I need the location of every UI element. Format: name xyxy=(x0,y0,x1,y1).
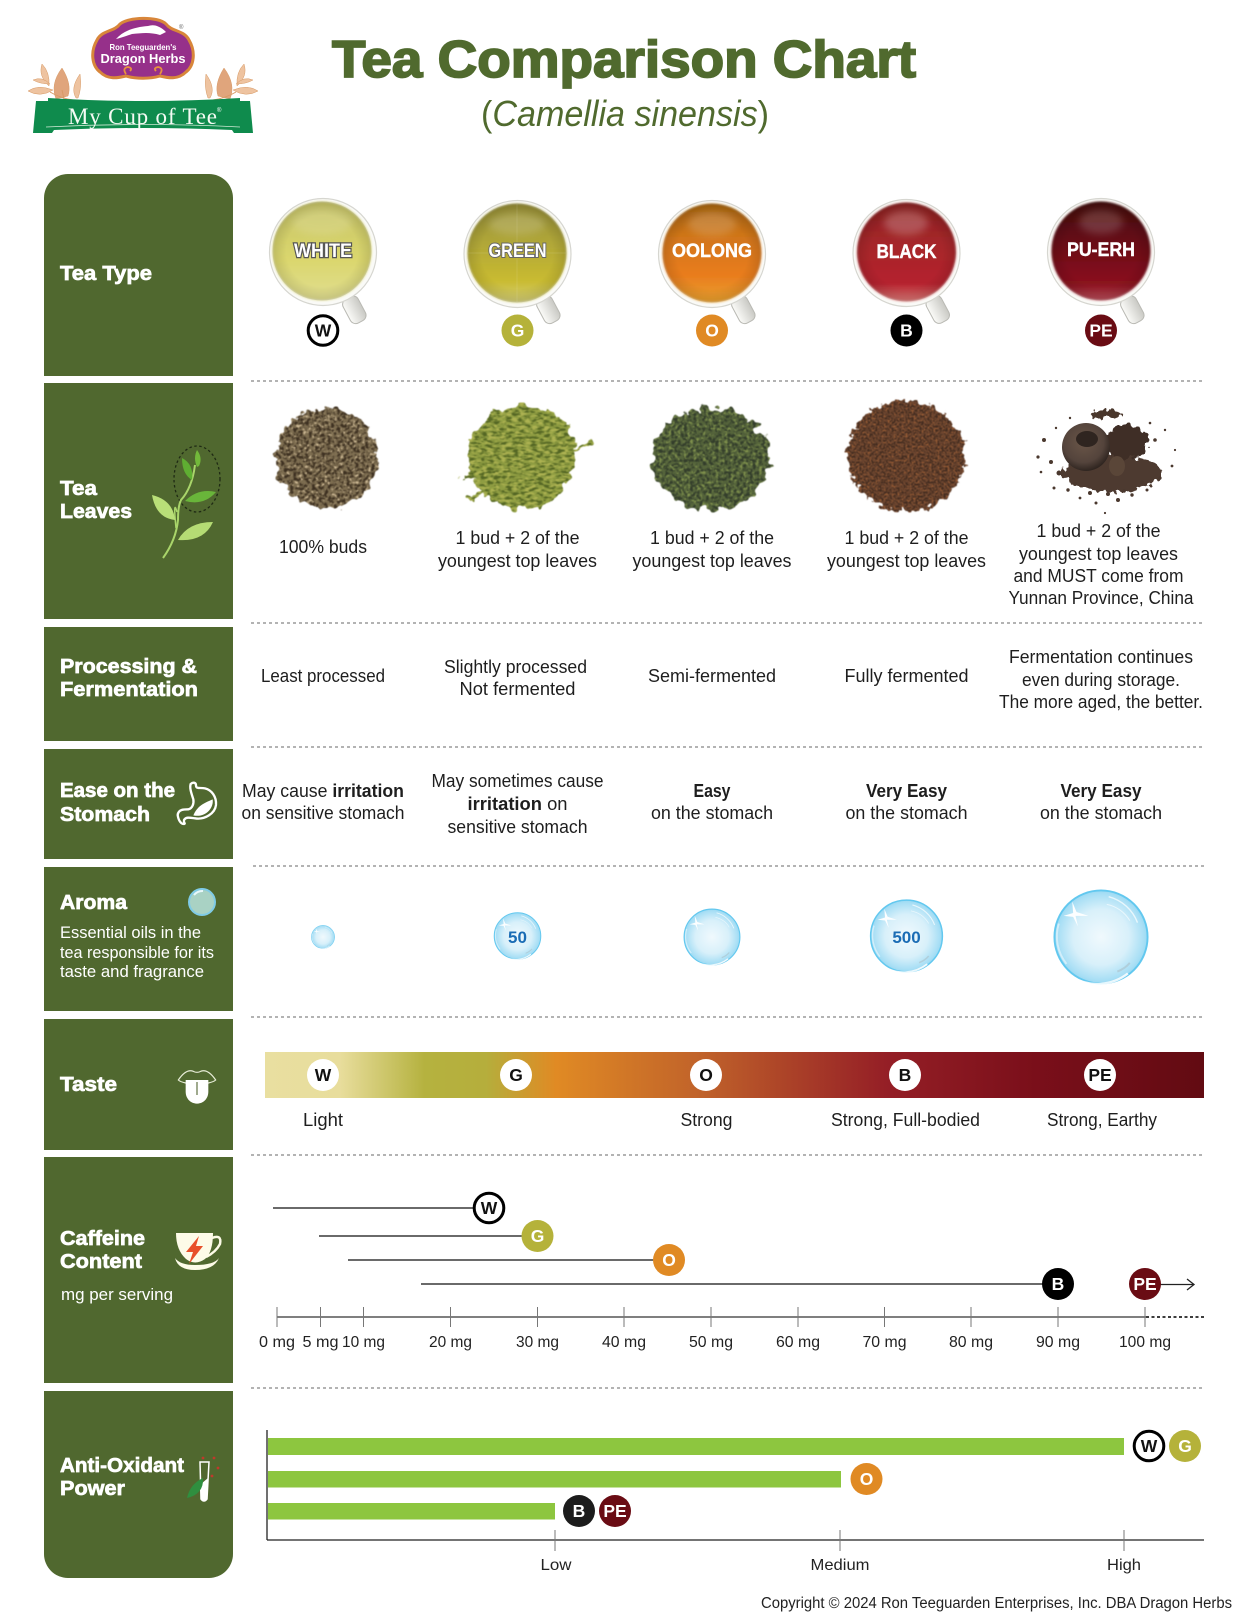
bar: black and pu-erh low xyxy=(268,1503,555,1520)
cup: pu-erh: PU-ERH xyxy=(1067,240,1135,261)
panel: aroma xyxy=(44,867,1148,1011)
caffeine axis: 10 mg xyxy=(342,1334,385,1351)
leaf pile: oolong xyxy=(652,408,770,510)
caffeine axis: 70 mg xyxy=(862,1334,906,1351)
badge: taste O: O xyxy=(699,1065,713,1085)
badge: antioxidant W: W xyxy=(1141,1436,1158,1456)
sidebar panel: taste xyxy=(44,1019,233,1150)
text: green leaves xyxy=(438,528,597,571)
heading: tea leaves xyxy=(60,477,132,523)
text: pu-erh leaves xyxy=(1008,521,1194,608)
heading: caffeine content: Content xyxy=(60,1250,142,1273)
caffeine range: green: G xyxy=(531,1226,544,1246)
heading: tea leaves: Leaves xyxy=(60,500,132,523)
badge: W xyxy=(308,316,338,345)
logo badge xyxy=(93,18,193,78)
bubble: green 50: 50 xyxy=(508,928,527,947)
bubble: pu-erh xyxy=(1054,890,1148,984)
text: pu-erh leaves: and MUST come from xyxy=(1014,566,1184,586)
icon: stomach xyxy=(178,783,216,824)
badge: antioxidant PE xyxy=(599,1495,631,1527)
badge: G: G xyxy=(511,320,524,340)
panel: anti-oxidant power xyxy=(44,1391,1204,1578)
badge: taste G xyxy=(500,1059,532,1091)
taste gradient bar xyxy=(265,1052,1204,1098)
badge: B xyxy=(890,314,922,346)
label: light: Light xyxy=(303,1110,343,1130)
icon: tongue and lips xyxy=(178,1071,216,1104)
heading: processing and fermentation: Fermentation xyxy=(60,678,198,701)
text: green stomach: May sometimes cause xyxy=(432,771,604,791)
caffeine range: white xyxy=(273,1193,504,1223)
text: oolong stomach xyxy=(651,781,773,823)
text: pu-erh leaves: youngest top leaves xyxy=(1019,544,1178,564)
badge: taste PE xyxy=(1084,1059,1116,1091)
caffeine axis: 0 mg xyxy=(259,1334,295,1351)
badge: antioxidant G xyxy=(1169,1430,1201,1462)
panel: tea type xyxy=(44,174,1154,376)
text: black stomach: Very Easy xyxy=(866,781,947,801)
text: pu-erh stomach xyxy=(1040,781,1162,823)
caffeine range: black: B xyxy=(1052,1274,1064,1294)
text: green stomach xyxy=(432,771,604,837)
text: black stomach xyxy=(846,781,968,823)
banner xyxy=(33,98,253,133)
logo: Dragon Herbs My Cup of Tee xyxy=(28,18,258,133)
heading: ease on the stomach: Ease on the xyxy=(60,779,175,802)
panel: tea leaves xyxy=(44,383,1194,619)
cup: white: WHITE xyxy=(294,241,352,262)
badge: W: W xyxy=(315,320,332,340)
text: oolong leaves xyxy=(632,528,792,571)
text: pu-erh processing: Fermentation continues xyxy=(1009,647,1193,667)
badge: B: B xyxy=(900,320,913,340)
text: pu-erh leaves: Yunnan Province, China xyxy=(1008,588,1194,608)
label: medium: Medium xyxy=(810,1557,870,1574)
title: Tea Comparison Chart xyxy=(332,31,916,89)
heading: tea leaves: Tea xyxy=(60,477,98,500)
icon: test tube xyxy=(187,1457,219,1501)
caffeine range: pu-erh with arrow: PE xyxy=(1133,1274,1157,1294)
text: black processing: Fully fermented xyxy=(844,666,968,686)
text: aroma description xyxy=(60,923,214,981)
cup: white xyxy=(270,198,376,326)
caffeine range: white: W xyxy=(481,1198,498,1218)
cup: oolong xyxy=(658,200,766,326)
sidebar panel: stomach xyxy=(44,749,233,859)
copyright: Copyright © 2024 Ron Teeguarden Enterprises, Inc. DBA Dragon Herbs xyxy=(761,1595,1232,1612)
label: high: High xyxy=(1107,1557,1141,1574)
text: white leaves: 100% buds xyxy=(279,537,367,557)
text: green leaves: 1 bud + 2 of the xyxy=(456,528,580,548)
heading: anti-oxidant power: Anti-Oxidant xyxy=(60,1454,184,1477)
heading: tea type: Tea Type xyxy=(60,262,152,285)
label: strong earthy: Strong, Earthy xyxy=(1047,1110,1157,1130)
text: green stomach: sensitive stomach xyxy=(448,817,588,837)
bubble: black 500 xyxy=(871,900,942,972)
heading: anti-oxidant power xyxy=(60,1454,184,1500)
text: oolong stomach: Easy xyxy=(694,781,730,801)
bubble: black 500: 500 xyxy=(892,928,921,947)
icon: left tea leaves xyxy=(28,64,81,100)
panel: taste xyxy=(44,1019,1204,1150)
leaf pile: black xyxy=(847,401,965,511)
text: aroma description: tea responsible for its xyxy=(60,943,214,962)
heading: aroma: Aroma xyxy=(60,891,128,914)
leaf pile: pu-erh cake xyxy=(1036,410,1176,514)
cup: green xyxy=(464,200,571,326)
bubble: white xyxy=(311,925,335,949)
badge: O xyxy=(696,314,728,346)
caffeine axis: 5 mg xyxy=(302,1334,338,1351)
text: oolong processing: Semi-fermented xyxy=(648,666,776,686)
text: black leaves: 1 bud + 2 of the xyxy=(844,528,968,548)
text: pu-erh processing: even during storage. xyxy=(1022,670,1180,690)
badge: G xyxy=(502,314,534,346)
sidebar panel: anti-oxidant xyxy=(44,1391,233,1578)
caffeine axis: 40 mg xyxy=(602,1334,646,1351)
chart axes xyxy=(267,1430,1204,1551)
logo badge: Dragon Herbs xyxy=(100,52,186,66)
banner: ® xyxy=(217,107,222,114)
label: strong full-bodied: Strong, Full-bodied xyxy=(831,1110,980,1130)
text: black leaves: youngest top leaves xyxy=(827,551,986,571)
text: pu-erh processing xyxy=(999,647,1203,712)
heading: caffeine content xyxy=(60,1227,173,1304)
subtitle: (Camellia sinensis) xyxy=(481,93,769,134)
badge: antioxidant B: B xyxy=(573,1501,585,1521)
caffeine axis: 90 mg xyxy=(1036,1334,1080,1351)
text: oolong stomach: on the stomach xyxy=(651,803,773,823)
logo badge: ® xyxy=(179,24,184,31)
caffeine axis: 100 mg xyxy=(1119,1334,1171,1351)
badge: taste W xyxy=(307,1059,339,1091)
badge: O: O xyxy=(705,320,719,340)
cup: pu-erh xyxy=(1048,198,1154,326)
icon: tea sprig xyxy=(152,446,220,558)
badge: taste O xyxy=(690,1059,722,1091)
panel: caffeine content xyxy=(44,1157,1205,1383)
text: green processing: Not fermented xyxy=(460,679,576,699)
bar: oolong medium xyxy=(268,1471,841,1488)
badge: antioxidant O: O xyxy=(860,1469,873,1489)
caffeine axis: 30 mg xyxy=(516,1334,559,1351)
badge: taste G: G xyxy=(509,1065,523,1085)
icon: aroma bubble xyxy=(189,889,215,915)
badge: antioxidant B xyxy=(563,1495,595,1527)
badge: taste PE: PE xyxy=(1088,1065,1112,1085)
text: aroma description: Essential oils in the xyxy=(60,923,201,942)
text: pu-erh stomach: Very Easy xyxy=(1060,781,1142,801)
caffeine axis xyxy=(259,1307,1205,1351)
heading: ease on the stomach: Stomach xyxy=(60,803,150,826)
heading: caffeine content: Caffeine xyxy=(60,1227,145,1250)
label: strong: Strong xyxy=(680,1110,732,1130)
text: black stomach: on the stomach xyxy=(846,803,968,823)
text: pu-erh stomach: on the stomach xyxy=(1040,803,1162,823)
badge: antioxidant G: G xyxy=(1178,1436,1192,1456)
caffeine axis: 20 mg xyxy=(429,1334,472,1351)
bubble: green 50 xyxy=(494,913,541,960)
text: white stomach xyxy=(242,781,404,823)
caffeine range: green xyxy=(319,1220,554,1252)
badge: PE xyxy=(1085,314,1117,346)
sidebar panel: processing xyxy=(44,627,233,741)
heading: anti-oxidant power: Power xyxy=(60,1477,125,1500)
heading: processing and fermentation xyxy=(60,655,198,701)
text: black leaves xyxy=(827,528,986,571)
text: aroma description: taste and fragrance xyxy=(60,962,204,981)
text: green stomach: irritation on xyxy=(468,794,568,814)
text: oolong leaves: youngest top leaves xyxy=(632,551,792,571)
cup: black xyxy=(853,200,960,325)
bar: white and green high xyxy=(268,1438,1124,1455)
text: white processing: Least processed xyxy=(261,666,385,686)
caffeine range: pu-erh with arrow xyxy=(1129,1268,1194,1300)
text: pu-erh leaves: 1 bud + 2 of the xyxy=(1036,521,1160,541)
heading: caffeine content: mg per serving xyxy=(61,1285,173,1304)
text: green processing xyxy=(444,657,587,699)
cup: green: GREEN xyxy=(488,241,546,262)
cup: black: BLACK xyxy=(876,242,937,263)
leaf pile: green xyxy=(462,406,590,508)
heading: taste: Taste xyxy=(60,1073,117,1096)
heading: processing and fermentation: Processing & xyxy=(60,655,197,678)
badge: PE: PE xyxy=(1089,320,1113,340)
badge: taste W: W xyxy=(315,1065,332,1085)
text: white stomach: May cause irritation xyxy=(242,781,404,801)
bubble: oolong xyxy=(684,909,740,965)
heading: ease on the stomach xyxy=(60,779,175,826)
badge: antioxidant O xyxy=(850,1463,882,1495)
badge: antioxidant W xyxy=(1134,1431,1164,1461)
sidebar panel: tea type xyxy=(44,174,233,376)
sidebar panel: aroma xyxy=(44,867,233,1011)
panel: processing and fermentation xyxy=(44,627,1203,741)
text: pu-erh processing: The more aged, the better. xyxy=(999,692,1203,712)
label: low: Low xyxy=(540,1557,572,1574)
panel: ease on the stomach xyxy=(44,749,1162,859)
caffeine range: black xyxy=(421,1268,1074,1300)
caffeine range: oolong xyxy=(348,1244,685,1276)
text: oolong leaves: 1 bud + 2 of the xyxy=(650,528,774,548)
logo badge: Ron Teeguarden's xyxy=(110,42,177,52)
text: white stomach: on sensitive stomach xyxy=(242,803,404,823)
caffeine axis: 60 mg xyxy=(776,1334,820,1351)
caffeine range: oolong: O xyxy=(662,1250,676,1270)
caffeine axis: 80 mg xyxy=(949,1334,993,1351)
cup: oolong: OOLONG xyxy=(672,241,752,262)
caffeine axis: 50 mg xyxy=(689,1334,733,1351)
banner: My Cup of Tee xyxy=(68,104,217,129)
sidebar panel: caffeine xyxy=(44,1157,233,1383)
badge: antioxidant PE: PE xyxy=(603,1501,627,1521)
text: green leaves: youngest top leaves xyxy=(438,551,597,571)
text: green processing: Slightly processed xyxy=(444,657,587,677)
badge: taste B xyxy=(889,1059,921,1091)
icon: right tea leaves xyxy=(205,64,258,100)
sidebar panel: tea leaves xyxy=(44,383,233,619)
leaf pile: white xyxy=(276,408,378,508)
badge: taste B: B xyxy=(899,1065,911,1085)
divider lines xyxy=(251,381,1206,1388)
icon: caffeine cup xyxy=(175,1233,220,1270)
